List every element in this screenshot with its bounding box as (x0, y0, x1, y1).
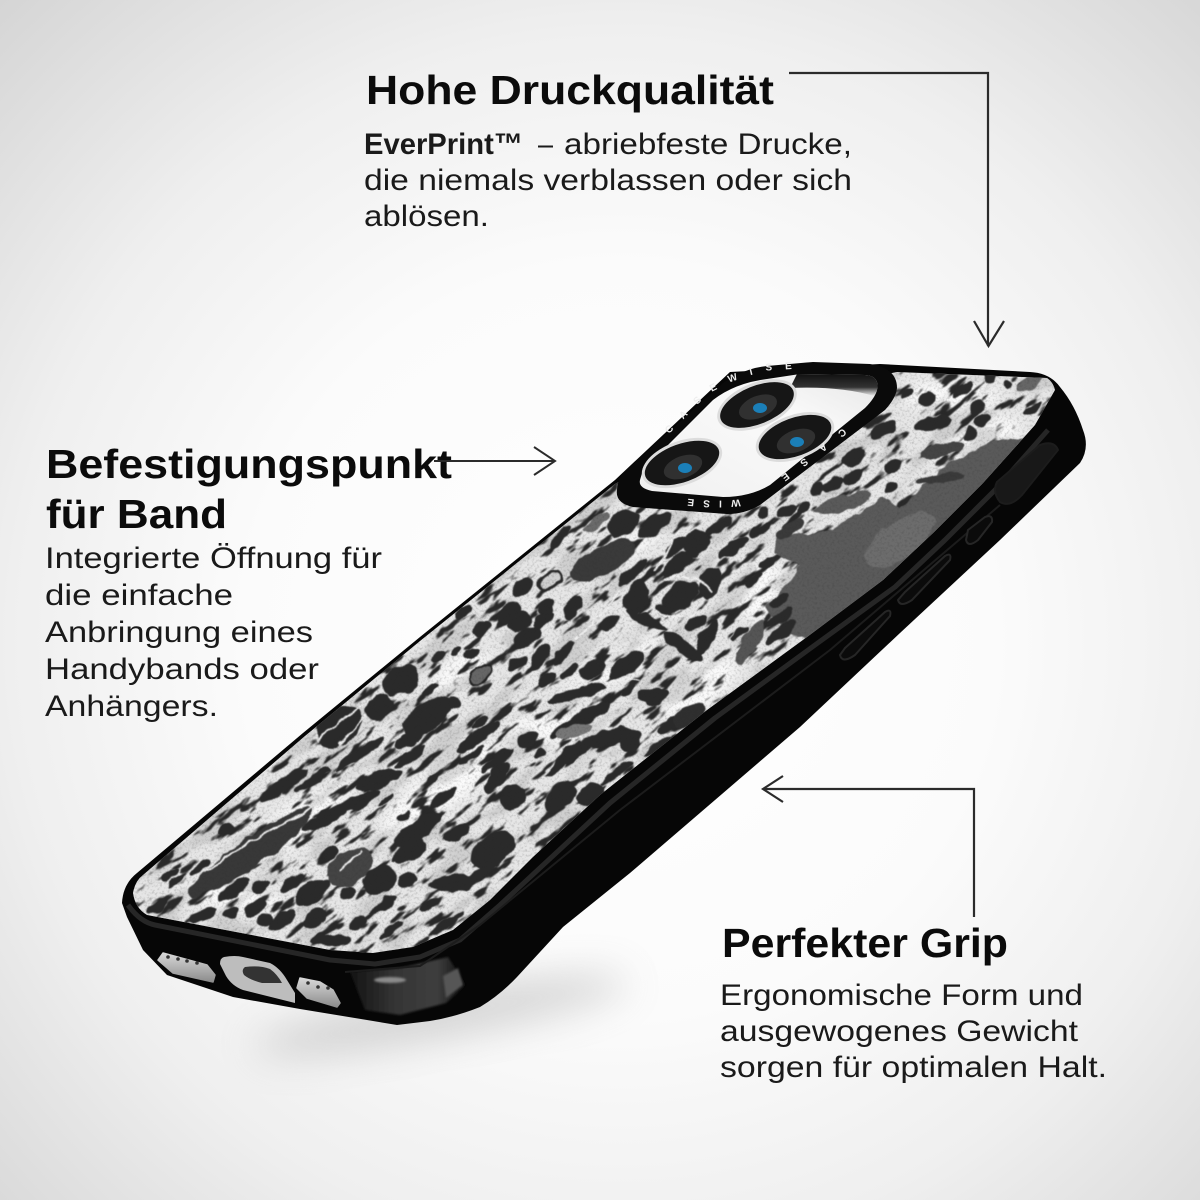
description: strap attachment: Integrierte Öffnung für (45, 542, 382, 575)
speaker left (158, 953, 215, 982)
speaker right (297, 978, 340, 1007)
description: grip: ausgewogenes Gewicht (720, 1015, 1079, 1048)
grey mottling (138, 372, 1054, 952)
side buttons (840, 443, 1058, 660)
lens top (710, 369, 804, 441)
blobs near camera (634, 368, 1046, 630)
highlights on corner (374, 968, 463, 998)
camera window (640, 374, 878, 497)
rim lip lines (128, 430, 1048, 972)
bump frame (617, 362, 897, 514)
heading: Befestigungspunkt für Band: Befestigungspunkt (46, 441, 452, 487)
description: grip: Ergonomische Form und (720, 979, 1083, 1012)
fine marble texture (135, 372, 1052, 952)
callout: print quality (364, 67, 852, 233)
light patches (179, 381, 1028, 922)
description: print quality: – (538, 128, 553, 161)
marble print panel (133, 372, 1055, 953)
print base (133, 372, 1055, 953)
lens right (749, 402, 841, 472)
description: strap attachment: Anhängers. (45, 690, 218, 723)
description: print quality: EverPrint™ (364, 128, 523, 161)
arrow: grip (763, 776, 974, 917)
callout: strap attachment (45, 441, 452, 723)
brand ring text: CASE (781, 429, 846, 482)
description: strap attachment: Anbringung eines (45, 616, 313, 649)
description: grip (720, 979, 1107, 1084)
bottom face sheen (350, 957, 466, 1015)
description: strap attachment: Handybands oder (45, 653, 319, 686)
description: print quality: die niemals verblassen oder sich (364, 164, 852, 197)
description: strap attachment (45, 542, 382, 723)
description: grip: sorgen für optimalen Halt. (720, 1051, 1107, 1084)
charging port (220, 956, 295, 1003)
case body (122, 364, 1086, 1025)
heading: Befestigungspunkt für Band: für Band (46, 491, 227, 537)
callout: grip (720, 920, 1107, 1084)
window top shade (790, 374, 878, 396)
print grain (134, 372, 1054, 952)
brand ring text (666, 362, 846, 508)
blobs lower left (145, 658, 522, 946)
description: print quality: ablösen. (364, 200, 489, 233)
phone drop shadow (249, 960, 631, 1070)
phone case illustration (122, 364, 1086, 1025)
brand ring text: WISE (688, 498, 741, 508)
arrow: print quality (789, 73, 1004, 346)
marble blobs (145, 368, 1046, 946)
description: strap attachment: die einfache (45, 579, 233, 612)
white veins (205, 530, 712, 872)
brand ring text: CASEWISE (666, 362, 792, 432)
heading: Befestigungspunkt für Band (46, 441, 452, 537)
arrow: strap attachment (434, 447, 555, 475)
dark wash patch (767, 437, 1040, 640)
heading: Perfekter Grip: Perfekter Grip (722, 920, 1008, 966)
lens left (635, 428, 729, 498)
blobs centre (351, 503, 800, 817)
heading: Hohe Druckqualität: Hohe Druckqualität (366, 67, 774, 113)
description: print quality (364, 128, 852, 233)
camera bump (616, 362, 897, 514)
description: print quality: abriebfeste Drucke, (564, 128, 852, 161)
